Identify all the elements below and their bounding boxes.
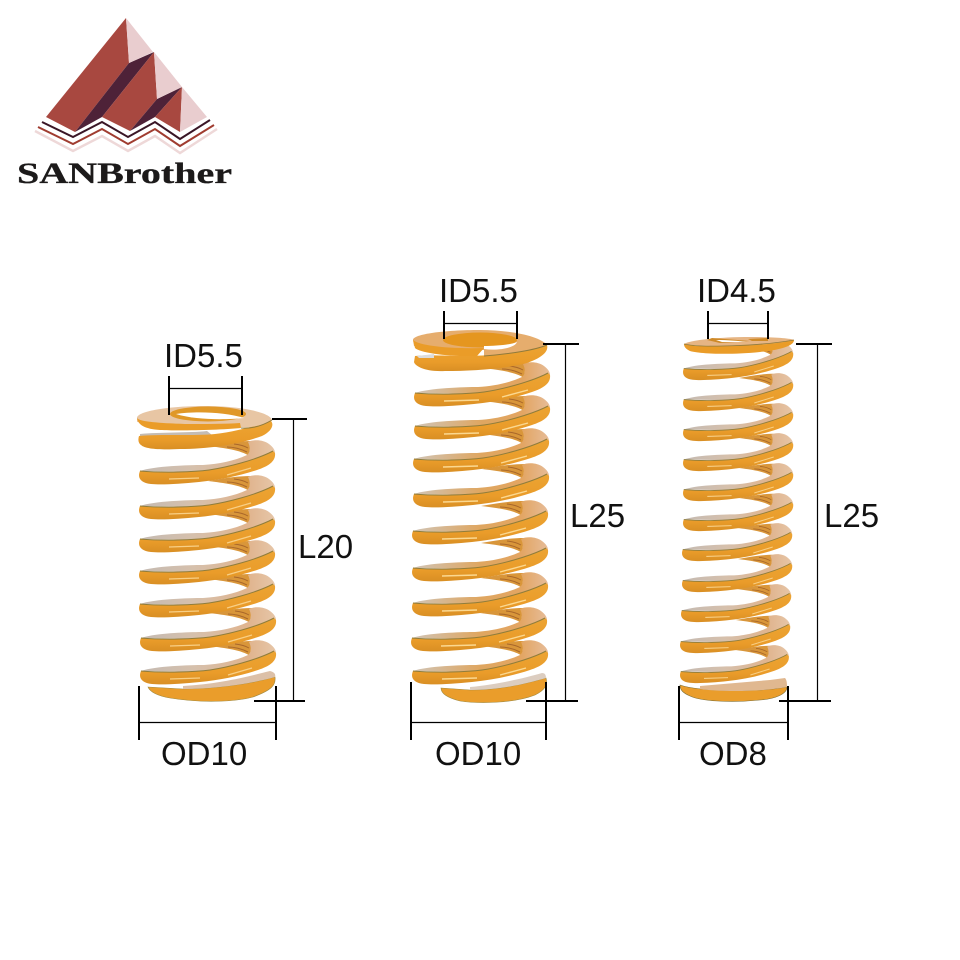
- label: ID4.5: ID4.5: [697, 272, 776, 309]
- L20 bracket: [254, 419, 307, 701]
- bottom washer: [441, 673, 547, 703]
- OD8 bracket: [679, 686, 788, 740]
- label: OD10 spring 2: OD10: [435, 735, 521, 772]
- ID4.5 bracket: [708, 311, 768, 339]
- label: L20: L20: [298, 528, 353, 565]
- dimensions: spring 1: [139, 376, 307, 740]
- L25 bracket: [526, 344, 579, 701]
- label: L25 spring 3: L25: [824, 497, 879, 534]
- spring 2: OD10 L25: [411, 330, 550, 703]
- bottom washer: [680, 678, 787, 701]
- dimensions: spring 2: [411, 311, 579, 740]
- coils: [680, 342, 793, 683]
- ID5.5 bracket: [169, 376, 242, 415]
- top ring: [684, 337, 794, 354]
- spring 1: OD10 L20: [137, 406, 276, 701]
- top ring: [413, 330, 547, 371]
- bottom washer: [148, 671, 275, 701]
- ID5.5 bracket: [444, 311, 517, 339]
- label: OD8: OD8: [699, 735, 767, 772]
- label: ID5.5 spring 2: ID5.5: [439, 272, 518, 309]
- label: OD10 spring 1: OD10: [161, 735, 247, 772]
- spring 3: OD8 L25: [680, 337, 794, 701]
- logo: SANBrother: [17, 18, 232, 190]
- logo mark: red pyramid: [35, 18, 217, 153]
- OD10 bracket: [411, 682, 546, 740]
- dimensions: spring 3: [679, 311, 832, 740]
- OD10 bracket: [139, 686, 276, 740]
- L25 bracket: [779, 344, 832, 701]
- label: ID5.5 spring 1: ID5.5: [164, 337, 243, 374]
- coils: [139, 440, 276, 684]
- label: L25 spring 2: L25: [570, 497, 625, 534]
- logo wordmark: SANBrother: [17, 157, 232, 190]
- coils: [411, 362, 550, 684]
- top ring: [137, 406, 272, 449]
